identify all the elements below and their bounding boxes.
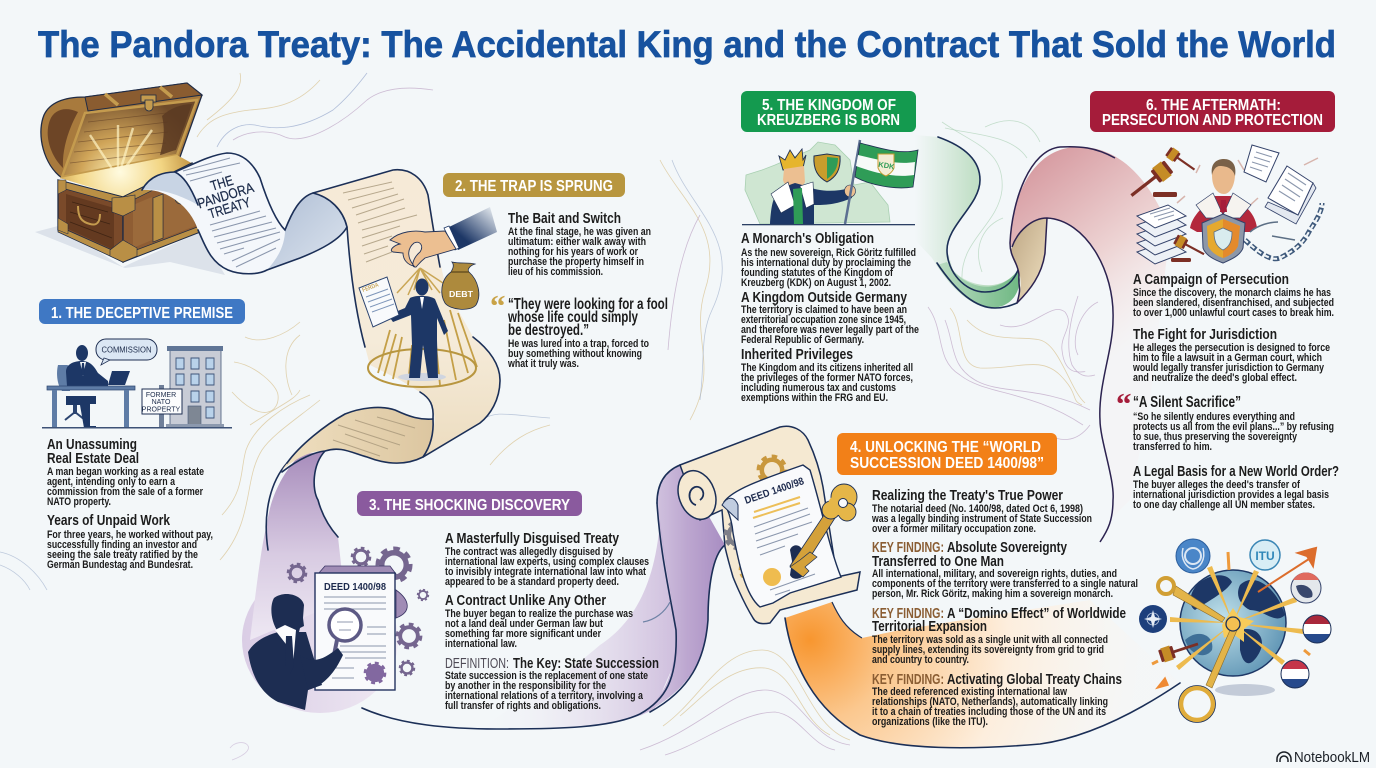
text: the fight for jurisdiction: him to file a lawsuit in a German court, which <box>1133 352 1322 364</box>
text: key finding treaty chains: it to a chain of treaties including those of the UN and its <box>872 706 1106 718</box>
text: a kingdom outside germany: The territory is claimed to have been an <box>741 304 907 316</box>
text: a kingdom outside germany: exterritorial occupation zone since 1945, <box>741 314 906 326</box>
chest body <box>58 180 123 262</box>
text: a legal basis for a new world order: international jurisdiction provides a legal basis <box>1133 489 1329 501</box>
section 2: the trap is sprung <box>359 173 668 387</box>
section 6: the aftermath <box>1090 91 1339 511</box>
text: an unassuming real estate deal <box>47 437 204 508</box>
ribbon section: cream upper <box>282 170 500 472</box>
text: a kingdom outside germany: A Kingdom Outside Germany <box>741 290 907 306</box>
text: the bait and switch: purchase the property himself in <box>508 256 644 268</box>
text: a legal basis for a new world order: The buyer alleges the deed's transfer of <box>1133 479 1300 491</box>
NotebookLM watermark: NotebookLM <box>1294 750 1370 766</box>
ribbon section: purple bottom sweep <box>362 465 725 730</box>
text: a monarch's obligation <box>741 231 916 289</box>
icon: hand dropping cage over figure <box>359 207 497 387</box>
text: an unassuming real estate deal: Real Estate Deal <box>47 451 139 467</box>
text: the bait and switch: nothing for his years of work or <box>508 246 639 258</box>
text: key finding domino effect <box>872 606 1126 666</box>
text: key finding domino effect: Territorial Expansion <box>872 619 987 635</box>
text: years of unpaid work <box>47 513 213 571</box>
text: key finding domino effect: supply lines, extending its sovereignty from grid to grid <box>872 644 1104 656</box>
pull quote: looking for a fool: “They were looking for a fool <box>508 296 668 313</box>
text: key finding treaty chains: organizations (like the ITU). <box>872 716 988 728</box>
icon: globe with key and treaty organizations <box>1139 539 1331 722</box>
upper key <box>1158 578 1225 622</box>
badge 4: 4. UNLOCKING THE “WORLD <box>850 439 1041 456</box>
icon: treasure chest <box>35 83 225 275</box>
text: a monarch's obligation: Kreuzberg (KDK) on August 1, 2002. <box>741 277 891 289</box>
text: a monarch's obligation: his international duty by proclaiming the <box>741 257 911 269</box>
ribbon section: crimson <box>1010 147 1170 542</box>
decorative flowing lines <box>0 73 1098 760</box>
text: the bait and switch: At the final stage, he was given an <box>508 226 651 238</box>
text: the bait and switch: The Bait and Switch <box>508 211 621 227</box>
circle: netherlands flag two <box>1281 660 1309 688</box>
icon: scroll deed with golden key: DEED 1400/98 <box>743 475 806 507</box>
scroll title: TREATY <box>206 194 253 222</box>
badge 2: 2. THE TRAP IS SPRUNG <box>455 178 613 195</box>
text: an unassuming real estate deal: A man began working as a real estate <box>47 466 204 478</box>
text: inherited privileges: exemptions within the FRG and EU. <box>741 392 888 404</box>
rays <box>1170 566 1303 670</box>
text: inherited privileges: the privileges of the former NATO forces, <box>741 372 913 384</box>
text: definition of state succession: by another in the responsibility for the <box>445 680 606 692</box>
pull quote: looking for a fool: He was lured into a trap, forced to <box>508 338 649 350</box>
text: key finding domino effect: KEY FINDING: <box>872 606 944 622</box>
pull quote: looking for a fool <box>490 288 668 370</box>
text: realizing the treaty's true power: Realizing the Treaty's True Power <box>872 488 1063 504</box>
text: inherited privileges: The Kingdom and its citizens inherited all <box>741 362 913 374</box>
pull quote: looking for a fool: be destroyed.” <box>508 322 589 339</box>
ribbon section: green <box>915 135 1020 308</box>
text: definition of state succession: international relations of a territory, involving a <box>445 690 644 702</box>
text: the fight for jurisdiction <box>1132 327 1330 384</box>
text: key finding treaty chains: KEY FINDING: <box>872 672 944 688</box>
text: key finding domino effect: A “Domino Effect” of Worldwide <box>947 606 1126 622</box>
pull quote: a silent sacrifice: transferred to him. <box>1133 441 1212 453</box>
badge 5 <box>741 91 916 132</box>
icon: agent at desk and building: COMMISSION <box>102 346 152 354</box>
section 5: the kingdom of kreuzberg <box>741 91 919 404</box>
text: a monarch's obligation: As the new sovereign, Rick Göritz fulfilled <box>741 247 916 259</box>
section 1: the deceptive premise <box>39 299 245 571</box>
text: the fight for jurisdiction: He alleges the persecution is designed to force <box>1133 342 1330 354</box>
text: an unassuming real estate deal: An Unassuming <box>47 437 137 453</box>
pull quote: a silent sacrifice: “So he silently endures everything and <box>1133 411 1295 423</box>
ribbon writing lines <box>343 182 417 262</box>
icon: hand dropping cage over figure: DEBT <box>449 289 474 299</box>
text: a masterfully disguised treaty <box>445 531 649 588</box>
text: key finding absolute sovereignty: All international, military, and sovereign rights, duties, and <box>872 568 1117 580</box>
text: realizing the treaty's true power: The notarial deed (No. 1400/98, dated Oct 6, 1998) <box>872 503 1083 515</box>
badge 4 <box>837 433 1057 475</box>
circle: UN <box>1176 539 1210 573</box>
badge 6: 6. THE AFTERMATH: <box>1146 97 1281 114</box>
text: an unassuming real estate deal: commission from the sale of a former <box>47 486 204 498</box>
chest opening with glow <box>60 155 195 197</box>
pull quote: a silent sacrifice <box>1116 386 1334 453</box>
text: definition of state succession: DEFINITION: <box>445 656 509 672</box>
text: definition of state succession: State succession is the replacement of one state <box>445 670 648 682</box>
text: a legal basis for a new world order: to one day challenge all UN member states. <box>1133 499 1315 511</box>
icon: monarch shielded from lawsuits <box>1126 145 1322 264</box>
text: a campaign of persecution <box>1133 272 1334 319</box>
text: the bait and switch <box>508 211 651 278</box>
text: a legal basis for a new world order <box>1133 464 1339 511</box>
text: a contract unlike any other: something far more significant under <box>445 628 602 640</box>
badge 6 <box>1090 91 1335 132</box>
text: the fight for jurisdiction: would legally transfer jurisdiction to Germany <box>1132 362 1325 374</box>
scroll title: PANDORA <box>195 179 256 211</box>
pull quote: a silent sacrifice: to sue, thus preserving the sovereignty <box>1133 431 1298 443</box>
pull quote: looking for a fool: what it truly was. <box>507 358 579 370</box>
text: a contract unlike any other: international law. <box>445 638 517 650</box>
text: a kingdom outside germany: and therefore was never legally part of the <box>741 324 919 336</box>
icon: king with flag on map: KDK <box>878 160 896 171</box>
text: a masterfully disguised treaty: A Masterfully Disguised Treaty <box>445 531 619 547</box>
text: the bait and switch: ultimatum: either walk away with <box>508 236 646 248</box>
text: a masterfully disguised treaty: international law experts, using complex clauses <box>445 556 649 568</box>
scroll title: THE <box>208 172 235 194</box>
text: a kingdom outside germany <box>741 290 919 346</box>
text: a masterfully disguised treaty: The contract was allegedly disguised by <box>445 546 614 558</box>
ribbon section: orange <box>785 600 1180 748</box>
icon: man inspecting deed with gears: DEED 1400/98 <box>324 581 386 593</box>
icon: agent at desk and building: FORMER <box>146 392 176 399</box>
circle: ITU: ITU <box>1255 549 1275 563</box>
text: a monarch's obligation: founding statutes of the Kingdom of <box>741 267 893 279</box>
icon: agent at desk and building <box>42 339 232 428</box>
pull quote: looking for a fool: buy something without knowing <box>508 348 642 360</box>
icon: scroll deed with golden key <box>672 426 860 624</box>
pull quote: a silent sacrifice: “A Silent Sacrifice” <box>1133 394 1241 411</box>
text: realizing the treaty's true power: over a former military occupation zone. <box>872 523 1036 535</box>
icon: agent at desk and building: NATO <box>152 399 171 406</box>
scroll title <box>192 166 260 224</box>
text: key finding absolute sovereignty: Transferred to One Man <box>872 554 1004 570</box>
section 4: unlocking the world succession deed <box>672 426 1138 728</box>
badge 1 <box>39 299 245 324</box>
section 3: the shocking discovery <box>248 491 659 712</box>
text: key finding absolute sovereignty: KEY FINDING: <box>872 540 944 556</box>
badge 2 <box>443 173 625 197</box>
text: inherited privileges: including numerous tax and customs <box>741 382 896 394</box>
text: years of unpaid work: successfully finding an investor and <box>47 539 197 551</box>
badge 3 <box>357 491 582 516</box>
text: definition of state succession <box>445 656 659 712</box>
stack of court papers <box>1137 205 1186 264</box>
text: definition of state succession: full transfer of rights and obligations. <box>445 700 601 712</box>
circle: map <box>1291 572 1321 603</box>
text: a monarch's obligation: A Monarch's Obligation <box>741 231 874 247</box>
badge 5: 5. THE KINGDOM OF <box>762 97 896 114</box>
icon: hand dropping cage over figure: FERDA <box>362 282 380 294</box>
text: the fight for jurisdiction: The Fight for Jurisdiction <box>1133 327 1277 343</box>
text: key finding domino effect: and country to country. <box>872 654 969 666</box>
badge 1: 1. THE DECEPTIVE PREMISE <box>51 305 233 322</box>
ribbon: flowing scroll path <box>142 135 1180 748</box>
text: a contract unlike any other: The buyer began to realize the purchase was <box>445 608 633 620</box>
icon: king with flag on map <box>742 140 918 225</box>
ribbon section: white treaty scroll <box>142 153 347 274</box>
text: key finding treaty chains: The deed referenced existing international law <box>872 686 1067 698</box>
ribbon section: purple lower-left <box>242 451 398 713</box>
circle: NATO <box>1139 605 1167 633</box>
text: years of unpaid work: Years of Unpaid Work <box>47 513 171 529</box>
text: realizing the treaty's true power <box>871 488 1092 535</box>
chest lid <box>41 83 202 178</box>
text: realizing the treaty's true power: was a legally binding instrument of State Succession <box>871 513 1092 525</box>
pull quote: looking for a fool: whose life could simply <box>507 309 638 326</box>
text: a campaign of persecution: Since the discovery, the monarch claims he has <box>1133 287 1331 299</box>
text: a contract unlike any other <box>445 593 633 650</box>
text: a campaign of persecution: A Campaign of Persecution <box>1133 272 1289 288</box>
text: a masterfully disguised treaty: appeared to be a standard property deed. <box>445 576 619 588</box>
text: key finding absolute sovereignty: components of the territory were transferred to a single natural <box>872 578 1138 590</box>
text: years of unpaid work: German Bundestag and Bundesrat. <box>47 559 193 571</box>
badge 3: 3. THE SHOCKING DISCOVERY <box>369 497 570 514</box>
text: key finding absolute sovereignty: person, Mr. Rick Göritz, making him a sovereign monarch. <box>872 588 1113 600</box>
text: definition of state succession: The Key: State Succession <box>513 656 659 672</box>
text: years of unpaid work: For three years, he worked without pay, <box>47 529 213 541</box>
icon: agent at desk and building: PROPERTY <box>142 406 181 414</box>
text: inherited privileges <box>741 347 913 404</box>
text: an unassuming real estate deal: NATO property. <box>47 496 111 508</box>
orange arrows and sparks <box>1258 548 1316 592</box>
text: key finding absolute sovereignty <box>872 540 1138 600</box>
pull quote: a silent sacrifice: “ <box>1116 386 1132 421</box>
text: key finding treaty chains: relationships (NATO, Netherlands), automatically linking <box>872 696 1108 708</box>
circle: ITU <box>1250 540 1280 570</box>
circle: netherlands flag one <box>1303 615 1331 643</box>
pull quote: looking for a fool: “ <box>490 288 506 323</box>
text: the bait and switch: lieu of his commission. <box>508 266 603 278</box>
text: a contract unlike any other: A Contract Unlike Any Other <box>445 593 606 609</box>
text: key finding treaty chains: Activating Global Treaty Chains <box>947 672 1122 688</box>
icon: man inspecting deed with gears <box>248 548 428 710</box>
badge 5: KREUZBERG IS BORN <box>757 112 900 129</box>
text: key finding treaty chains <box>872 672 1122 728</box>
text: a kingdom outside germany: Federal Republic of Germany. <box>741 334 864 346</box>
text: a masterfully disguised treaty: to invisibly integrate international law into what <box>445 566 646 578</box>
badge 4: SUCCESSION DEED 1400/98” <box>850 455 1044 472</box>
badge 6: PERSECUTION AND PROTECTION <box>1102 112 1323 129</box>
text: years of unpaid work: seeing the sale treaty ratified by the <box>47 549 198 561</box>
text: the fight for jurisdiction: and neutralize the deed's global effect. <box>1133 372 1297 384</box>
text: a contract unlike any other: not a land deal under German law but <box>445 618 603 630</box>
text: inherited privileges: Inherited Privileges <box>741 347 853 363</box>
text: key finding absolute sovereignty: Absolute Sovereignty <box>947 540 1067 556</box>
text: key finding domino effect: The territory was sold as a single unit with all connected <box>872 634 1108 646</box>
main key <box>1178 617 1240 722</box>
text: an unassuming real estate deal: agent, intending only to earn a <box>47 476 176 488</box>
